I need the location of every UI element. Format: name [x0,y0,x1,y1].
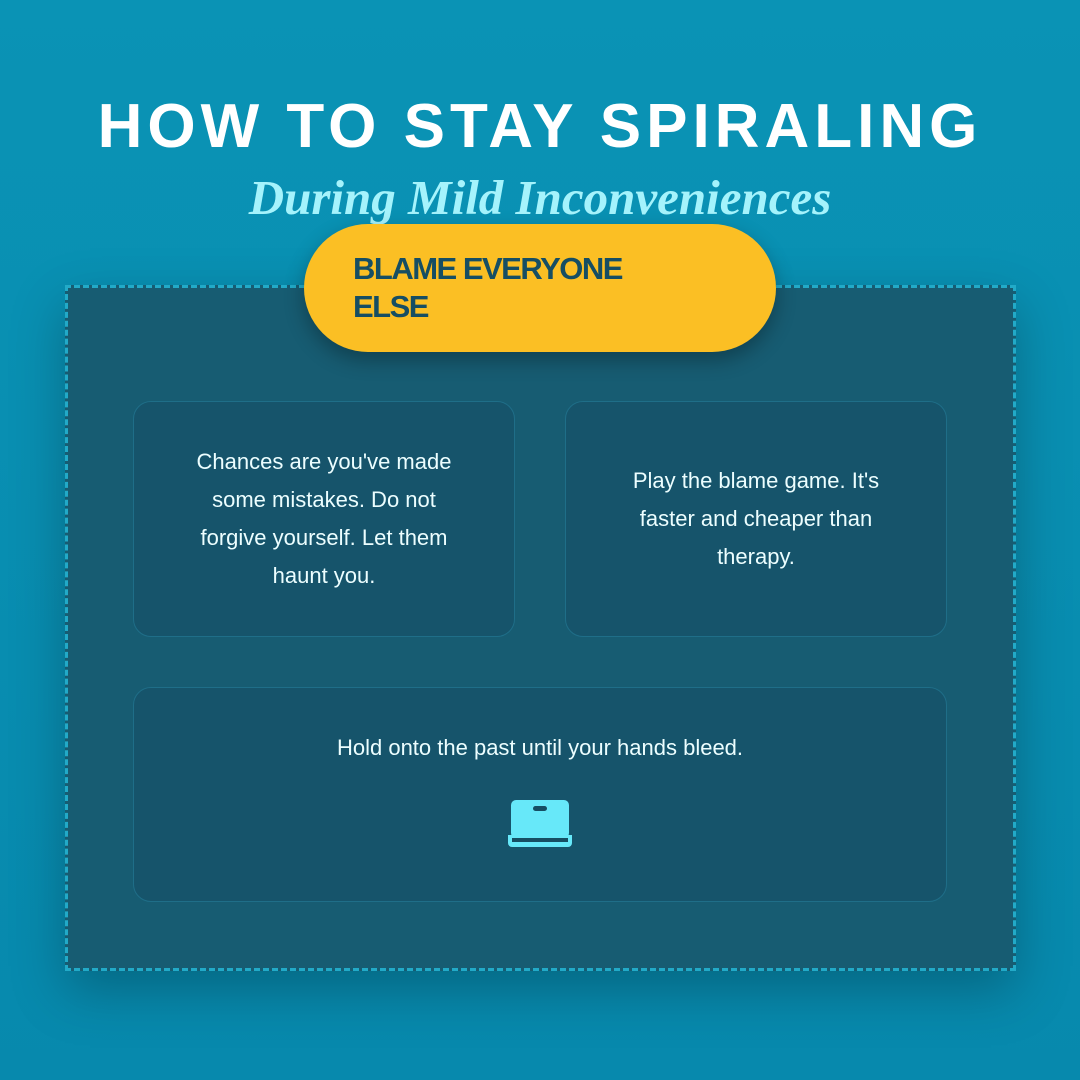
card: mistakes [133,401,515,637]
card: hold onto past [133,687,947,902]
pill heading: ELSE [353,289,428,324]
card: blame game: Play the blame game. It's faster and cheaper than therapy. [633,468,879,569]
title: HOW TO STAY SPIRALING [98,92,982,161]
subtitle: During Mild Inconveniences [249,170,831,225]
icon: laptop [508,800,572,847]
panel: main [65,285,1016,971]
pill heading: BLAME EVERYONE [353,251,622,286]
card: hold onto past: Hold onto the past until your hands bleed. [337,735,743,760]
card: blame game [565,401,947,637]
card: mistakes: Chances are you've made some mistakes. Do not forgive yourself. Let them haunt you. [197,449,451,588]
pill heading [304,224,776,352]
